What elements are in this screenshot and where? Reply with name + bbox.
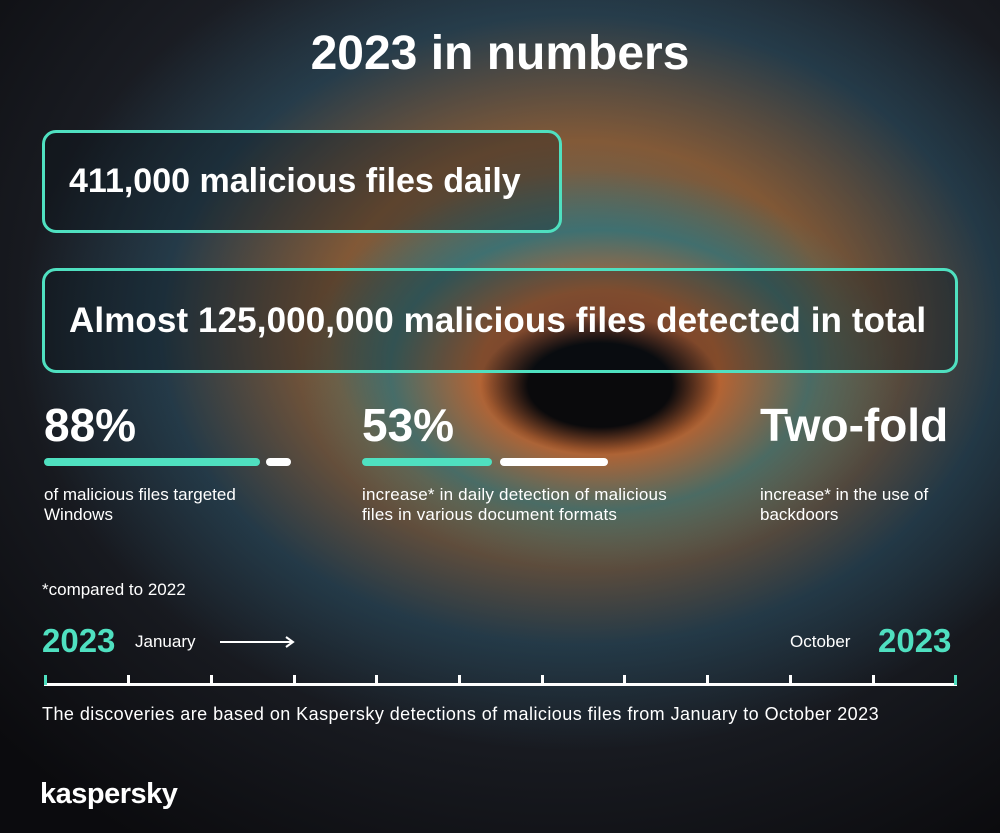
stat: 88%: of malicious files targeted Windows xyxy=(44,485,236,524)
stat: 88% xyxy=(44,399,291,524)
stat: 53%: 53% xyxy=(362,399,454,451)
timeline: 2023 xyxy=(878,622,951,659)
panel: daily files xyxy=(42,130,562,233)
stat: two-fold: increase* in the use of backdoors xyxy=(760,485,928,524)
panel: total files: Almost 125,000,000 malicious files detected in total xyxy=(69,300,926,340)
panel: daily files: 411,000 malicious files daily xyxy=(69,162,521,200)
stat: 88%: 88% xyxy=(44,399,136,451)
timeline xyxy=(42,622,951,659)
panel: total files xyxy=(42,268,958,373)
footnote: compared: *compared to 2022 xyxy=(42,580,186,599)
stat: 53%: files in various document formats xyxy=(362,505,617,524)
stat: two-fold xyxy=(760,399,948,524)
stat: 53%: increase* in daily detection of malicious xyxy=(362,485,667,504)
title: 2023 in numbers xyxy=(311,27,689,80)
timeline: 2023 xyxy=(42,622,115,659)
stat: two-fold: Two-fold xyxy=(760,399,948,451)
logo: kaspersky: kaspersky xyxy=(40,778,177,810)
stat: 53% xyxy=(362,399,667,524)
footnote: source: The discoveries are based on Kaspersky detections of malicious files from January to October 2023 xyxy=(42,704,879,724)
timeline: October xyxy=(790,632,850,651)
timeline: January xyxy=(135,632,195,651)
